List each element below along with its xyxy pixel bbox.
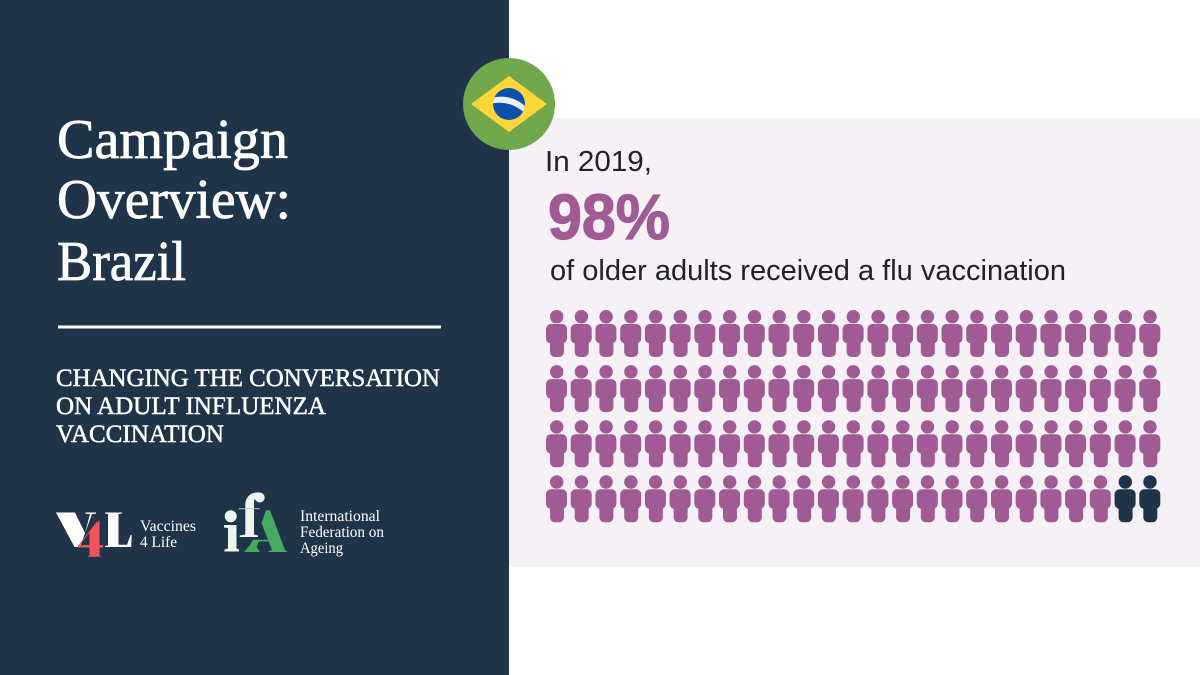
logo text: Vaccines 4 Life <box>140 518 196 551</box>
logo text: International Federation on Ageing: Federation on <box>300 524 384 541</box>
logo: International Federation on Ageing <box>224 492 384 557</box>
subtitle: VACCINATION <box>56 421 224 448</box>
text: of older adults received a flu vaccination: of older adults received a flu vaccination <box>550 255 1066 287</box>
title: Campaign <box>57 109 288 171</box>
panel: right statistic background <box>509 118 1200 567</box>
logo text: International Federation on Ageing: Ageing <box>300 540 343 557</box>
logo text: Vaccines 4 Life: 4 Life <box>140 534 177 551</box>
statistic: 98%: 98% <box>548 181 670 253</box>
panel: left navy background <box>0 0 509 675</box>
title <box>57 109 291 293</box>
pictogram: 98 of 100 people <box>546 310 1160 522</box>
title: Brazil <box>57 231 186 293</box>
logo mark: ifA <box>224 492 288 552</box>
text: In 2019: In 2019, <box>545 146 652 178</box>
icon: Brazil flag <box>463 58 555 150</box>
logo mark: V4L <box>56 512 132 557</box>
subtitle <box>56 365 440 448</box>
subtitle: CHANGING THE CONVERSATION <box>56 365 440 392</box>
logo: Vaccines 4 Life <box>56 512 196 557</box>
logo text: Vaccines 4 Life: Vaccines <box>140 518 196 535</box>
logo text: International Federation on Ageing <box>300 508 384 557</box>
logo text: International Federation on Ageing: International <box>300 508 380 525</box>
title: Overview: <box>57 169 291 231</box>
subtitle: ON ADULT INFLUENZA <box>56 393 326 420</box>
